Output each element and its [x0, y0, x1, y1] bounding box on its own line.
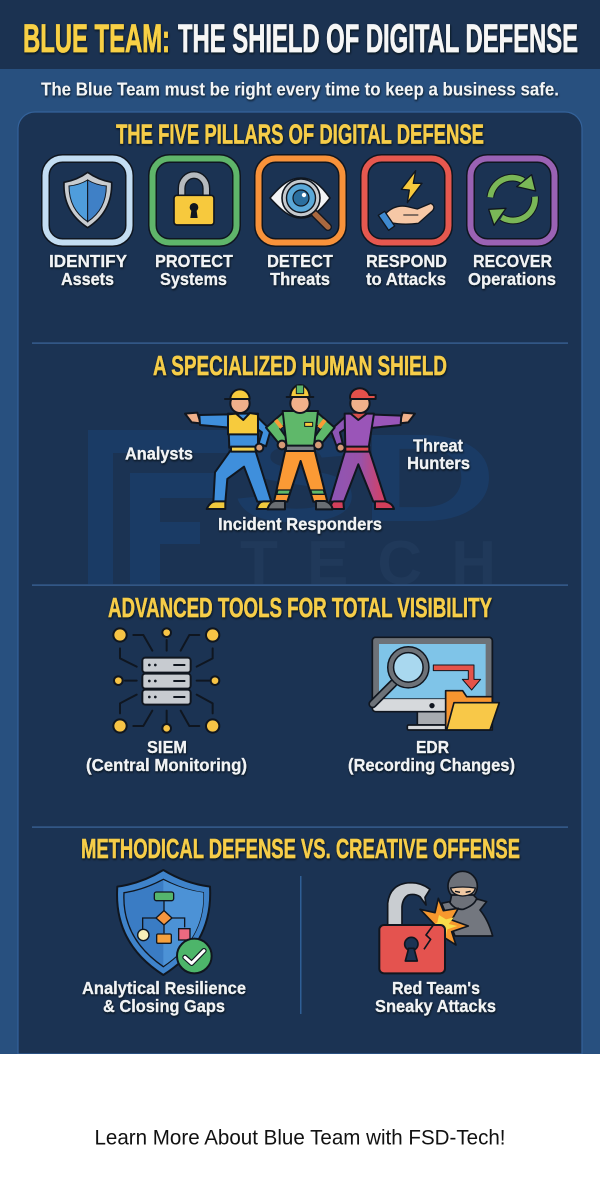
section heading: human shield: A SPECIALIZED HUMAN SHIELD: [153, 350, 447, 381]
pillar: protect: [152, 158, 236, 242]
label: red team: [375, 978, 496, 1016]
pillar label: identify: [49, 251, 127, 289]
label: red team: Sneaky Attacks: [375, 996, 496, 1016]
label: threat hunters: Hunters: [407, 453, 470, 473]
figure: threat hunter: [330, 388, 415, 509]
label: SIEM: SIEM: [147, 737, 187, 757]
pillar label: protect: [155, 251, 233, 289]
label: analysts: Analysts: [125, 444, 193, 464]
icon: broken lock and hacker: [379, 871, 493, 973]
icon: recovery arrows: [489, 175, 536, 225]
pillar: identify: [46, 158, 130, 242]
pillar label: recover: [468, 251, 556, 289]
title: BLUE TEAM:: [23, 17, 170, 61]
pillar label: detect: [267, 251, 333, 289]
watermark logo: [88, 430, 489, 584]
watermark logo: SD: [232, 409, 497, 548]
pillar: respond: [364, 158, 448, 242]
watermark logo: TECH: [240, 529, 496, 598]
footer text: Learn More About Blue Team with FSD-Tech!: [94, 1126, 506, 1150]
pillar label: respond: [366, 251, 447, 289]
pillar label: respond: RESPOND: [366, 251, 447, 271]
figure: incident responder: [266, 385, 335, 509]
label: EDR: (Recording Changes): [348, 755, 515, 775]
pillar: detect: [258, 158, 342, 242]
pillar label: detect: Threats: [270, 269, 330, 289]
subtitle: The Blue Team must be right every time to keep a business safe.: [41, 78, 559, 100]
icon: shield: [64, 172, 112, 228]
pillar label: protect: Systems: [160, 269, 227, 289]
label: analytical resilience: Analytical Resilience: [82, 978, 246, 998]
pillar label: detect: DETECT: [267, 251, 333, 271]
label: threat hunters: Threat: [413, 436, 463, 456]
icon: eye and magnifier: [270, 178, 330, 227]
label: EDR: EDR: [416, 737, 449, 757]
icon: EDR monitor and folder: [372, 637, 499, 730]
icon: hand with lightning: [378, 171, 434, 230]
pillar label: respond: to Attacks: [366, 269, 446, 289]
icon: SIEM server network: [113, 628, 219, 733]
pillar label: identify: Assets: [61, 269, 114, 289]
label: SIEM: [86, 737, 247, 775]
label: threat hunters: [407, 436, 470, 473]
icon: padlock: [174, 175, 214, 225]
title: [23, 17, 578, 61]
label: incident responders: Incident Responders: [218, 514, 382, 534]
figure: analyst: [185, 389, 271, 509]
label: red team: Red Team's: [392, 978, 480, 998]
icon: flowchart shield: [117, 870, 212, 975]
footer white area: [0, 1054, 600, 1200]
header band: [0, 0, 600, 69]
main panel: [18, 112, 582, 1054]
illustration: three team members: [185, 385, 415, 509]
pillar label: recover: Operations: [468, 269, 556, 289]
label: EDR: [348, 737, 515, 775]
label: analytical resilience: [82, 978, 246, 1016]
pillar: recover: [470, 158, 554, 242]
pillar label: protect: PROTECT: [155, 251, 233, 271]
pillar label: recover: RECOVER: [473, 251, 552, 271]
label: SIEM: (Central Monitoring): [86, 755, 247, 775]
pillar label: identify: IDENTIFY: [49, 251, 127, 271]
label: analytical resilience: & Closing Gaps: [103, 996, 225, 1016]
